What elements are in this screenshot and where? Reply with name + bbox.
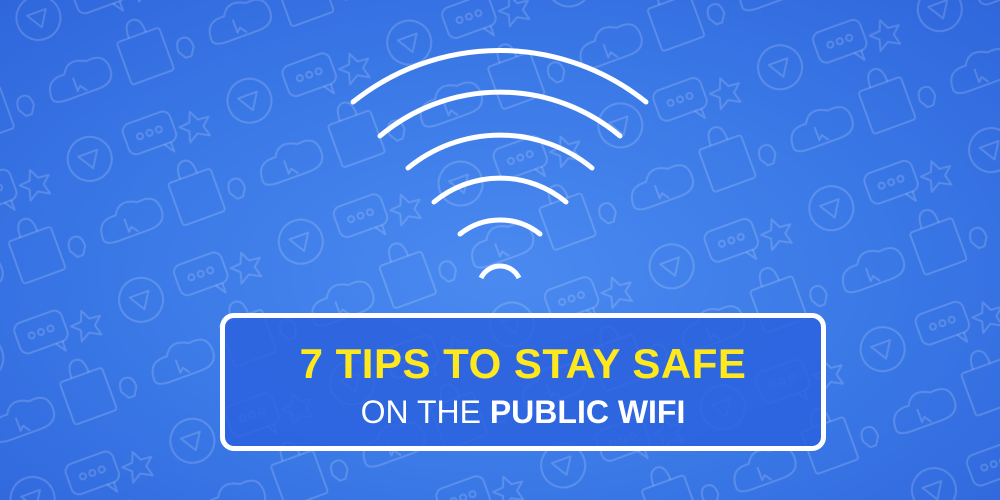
title banner <box>220 313 826 451</box>
subheading: ON THE PUBLIC WIFI <box>361 394 685 430</box>
heading: 7 TIPS TO STAY SAFE <box>300 340 746 387</box>
